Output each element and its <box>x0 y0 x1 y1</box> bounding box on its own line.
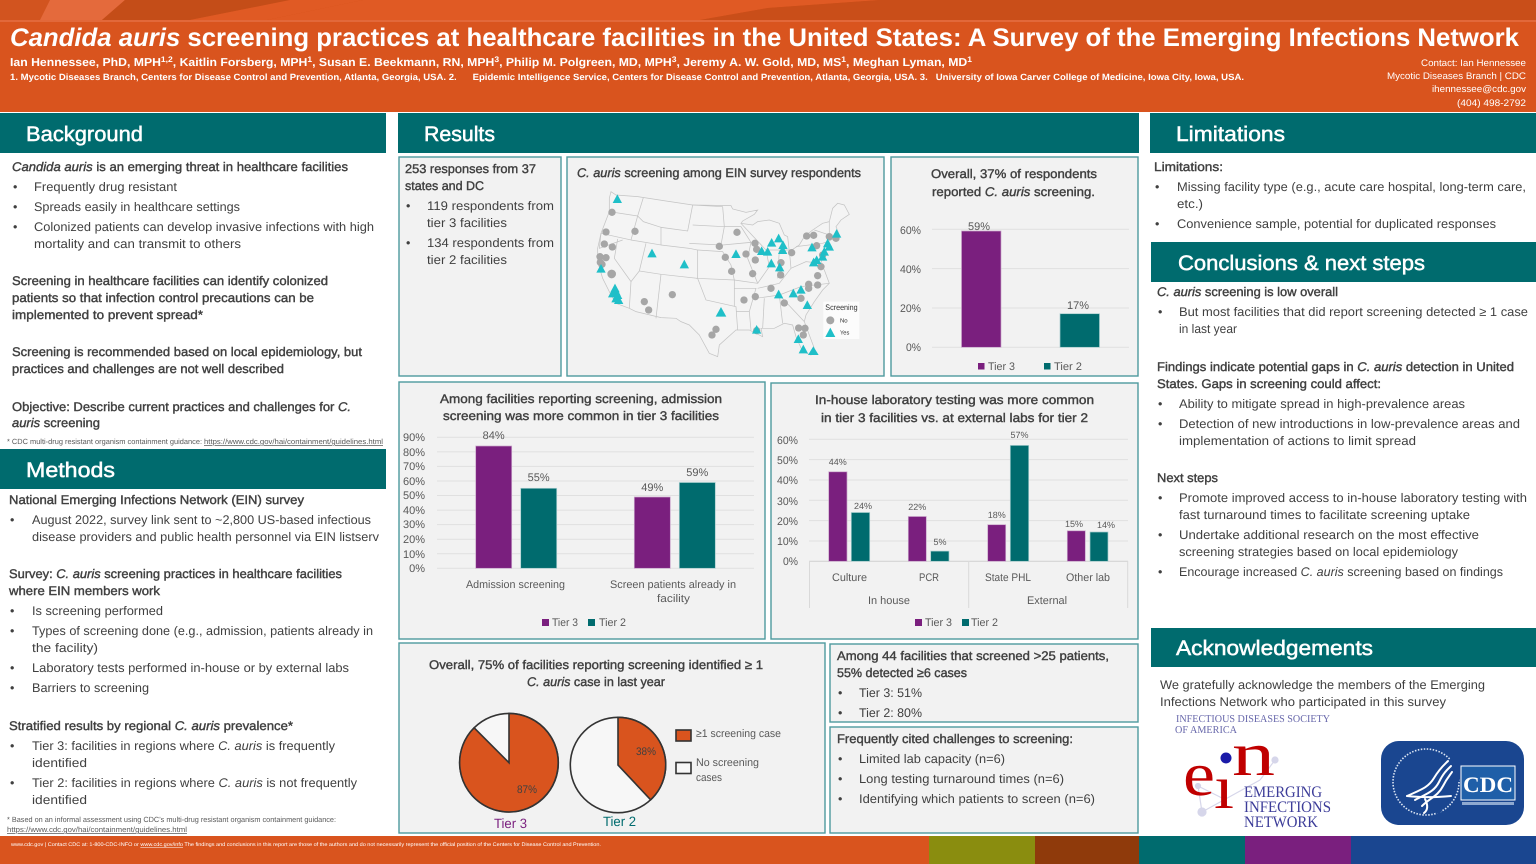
chart: tier 3 pie <box>460 713 558 812</box>
panel: laboratory testing bar chart: 22% <box>908 502 926 512</box>
panel: laboratory testing bar chart <box>771 383 1138 639</box>
panel: admission screening bar chart: 30% <box>403 519 425 531</box>
panel: methods <box>0 449 386 834</box>
panel: background: Frequently drug resistant <box>34 180 178 194</box>
panel: map <box>567 157 884 376</box>
panel: responses: 119 respondents from <box>427 199 554 213</box>
heading: results <box>398 113 1139 153</box>
panel: laboratory testing bar chart: PCR <box>919 572 939 584</box>
panel: admission screening bar chart: Tier 3 <box>552 617 578 629</box>
panel: background: • <box>13 200 17 214</box>
panel: conclusions and next steps: • <box>1158 491 1162 505</box>
contact: ihennessee@cdc.gov <box>1432 84 1526 95</box>
panel: acknowledgements <box>1151 628 1536 709</box>
chart: tier 3 pie: 87% <box>517 784 537 796</box>
panel: methods: • <box>10 776 14 790</box>
icon: EIN and IDSA logo <box>1175 714 1331 831</box>
panel: background: https://www.cdc.gov/hai/containment/guidelines.html <box>204 437 383 446</box>
panel: overall screening bar chart: Tier 2 <box>1054 361 1082 373</box>
authors: 3 <box>494 55 500 64</box>
panel: responses: 134 respondents from <box>427 236 554 250</box>
panel: laboratory testing bar chart: State PHL <box>985 572 1031 584</box>
footer <box>0 836 1536 864</box>
panel: laboratory testing bar chart: 20% <box>777 516 798 528</box>
panel: conclusions and next steps: implementation of actions to limit spread <box>1179 434 1416 448</box>
authors: 1 <box>967 55 973 64</box>
panel: laboratory testing bar chart: 57% <box>1010 430 1029 440</box>
panel: methods: identified <box>32 756 87 770</box>
icon: EIN and IDSA logo: INFECTIOUS DISEASES SOCIETY <box>1176 714 1330 725</box>
panel: pie charts: Tier 3 <box>494 816 527 831</box>
panel: challenges to screening: • <box>838 752 842 766</box>
panel: limitations <box>1150 113 1536 231</box>
chart: US map of respondents <box>596 192 859 357</box>
panel: conclusions and next steps: Undertake additional research on the most effective <box>1179 528 1479 542</box>
panel: methods: Tier 3: facilities in regions where C. auris is frequently <box>32 739 336 753</box>
panel: admission screening bar chart: 20% <box>403 534 425 546</box>
header banner <box>0 0 1536 112</box>
panel: methods: • <box>10 513 14 527</box>
panel: methods: Methods <box>26 459 115 482</box>
authors: Ian Hennessee, PhD, MPH <box>10 57 152 69</box>
panel: limitations: etc.) <box>1177 197 1203 211</box>
panel: challenges to screening: Limited lab capacity (n=6) <box>859 752 1005 766</box>
panel: acknowledgements: We gratefully acknowledge the members of the Emerging <box>1160 678 1485 692</box>
panel: admission screening bar chart: 55% <box>528 472 550 484</box>
panel: conclusions and next steps: • <box>1158 565 1162 579</box>
panel: responses: tier 3 facilities <box>427 216 507 230</box>
panel: overall screening bar chart: 40% <box>900 264 921 276</box>
panel: methods: * Based on an informal assessment using CDC’s multi-drug resistant organism containment guidance: <box>7 815 336 824</box>
panel: methods: • <box>10 604 14 618</box>
panel: laboratory testing bar chart: 24% <box>854 501 872 511</box>
panel: conclusions and next steps: fast turnaround times to facilitate screening uptake <box>1179 508 1470 522</box>
panel: overall screening bar chart: 59% <box>968 221 990 233</box>
panel: conclusions and next steps: C. auris screening is low overall <box>1157 285 1338 299</box>
panel: responses: • <box>406 199 410 213</box>
panel: background: Background <box>26 123 143 146</box>
panel: laboratory testing bar chart: in tier 3 facilities vs. at external labs for tier 2 <box>821 411 1088 425</box>
authors: , Meghan Lyman, MD <box>846 57 967 69</box>
panel: conclusions and next steps: Encourage increased C. auris screening based on findings <box>1179 565 1503 579</box>
panel: laboratory testing bar chart: 10% <box>777 536 798 548</box>
panel: background: auris screening <box>12 416 100 430</box>
panel: laboratory testing bar chart: 44% <box>829 457 847 467</box>
pie legend <box>676 728 781 784</box>
panel: overall screening bar chart: 17% <box>1067 300 1089 312</box>
affiliations: 1. Mycotic Diseases Branch, Centers for Disease Control and Prevention, Atlanta, Georgia, USA. 2. Epidemic Intelligence Service, Centers for Disease Control and Prevention, Atlanta, Georgia, USA. 3. University of Iowa Carver College of Medicine, Iowa City, Iowa, USA. <box>10 72 1244 82</box>
panel: conclusions and next steps: • <box>1158 528 1162 542</box>
panel: methods: disease providers and public health personnel via EIN listserv <box>32 530 380 544</box>
panel: admission screening bar chart: 0% <box>409 563 425 575</box>
panel: laboratory testing bar chart: Other lab <box>1066 572 1110 584</box>
panel: methods: • <box>10 681 14 695</box>
panel: laboratory testing bar chart: 40% <box>777 475 798 487</box>
panel: laboratory testing bar chart: 60% <box>777 435 798 447</box>
panel: methods: Survey: C. auris screening practices in healthcare facilities <box>9 567 342 581</box>
panel: overall screening bar chart: reported C. auris screening. <box>932 185 1095 199</box>
authors: 1 <box>307 55 313 64</box>
panel: conclusions and next steps: Findings indicate potential gaps in C. auris detection in United <box>1157 360 1514 374</box>
panel: methods: Stratified results by regional C. auris prevalence* <box>9 719 293 733</box>
panel: methods: the facility) <box>32 641 98 655</box>
icon: EIN and IDSA logo: n <box>1232 721 1275 789</box>
panel: admission screening bar chart: 49% <box>641 482 664 494</box>
icon: EIN and IDSA logo: e <box>1183 741 1215 809</box>
panel: map: C. auris screening among EIN survey respondents <box>577 166 861 180</box>
title: Candida auris screening practices at healthcare facilities in the United States: A Survey of the Emerging Infections Network <box>10 24 1520 52</box>
panel: overall screening bar chart: Tier 3 <box>988 361 1015 373</box>
panel: admission screening bar chart: 90% <box>403 432 425 444</box>
panel: methods: Laboratory tests performed in-house or by external labs <box>32 661 349 675</box>
panel: admission screening bar chart: 60% <box>403 476 425 488</box>
authors: , Philip M. Polgreen, MD, MPH <box>499 57 672 69</box>
panel: methods: • <box>10 661 14 675</box>
panel: methods: Is screening performed <box>32 604 163 618</box>
panel: laboratory testing bar chart: External <box>1027 595 1067 607</box>
panel: background: mortality and can transmit to others <box>34 237 241 251</box>
panel: laboratory testing bar chart: Tier 3 <box>925 617 952 629</box>
panel: overall screening bar chart: Overall, 37% of respondents <box>931 167 1097 181</box>
panel: methods: August 2022, survey link sent to ~2,800 US-based infectious <box>32 513 371 527</box>
panel: methods: https://www.cdc.gov/hai/containment/guidelines.html <box>7 825 187 834</box>
panel: admission screening bar chart: Tier 2 <box>599 617 626 629</box>
panel: methods: National Emerging Infections Network (EIN) survey <box>9 493 305 507</box>
panel: conclusions and next steps <box>1151 242 1536 579</box>
panel: acknowledgements: Acknowledgements <box>1176 637 1373 660</box>
contact <box>1387 58 1526 109</box>
panel: limitations: • <box>1155 180 1159 194</box>
panel: overall screening bar chart <box>891 157 1138 376</box>
panel: laboratory testing bar chart: 18% <box>988 510 1006 520</box>
pie legend: No screening <box>696 757 759 769</box>
chart: tier 2 pie <box>570 717 666 813</box>
panel: admission screening bar chart: Among facilities reporting screening, admission <box>440 392 722 406</box>
panel: limitations: Missing facility type (e.g., acute care hospital, long-term care, <box>1177 180 1526 194</box>
panel: responses: • <box>406 236 410 250</box>
panel: overall screening bar chart: 0% <box>906 342 921 354</box>
panel: challenges to screening <box>830 727 1138 833</box>
panel: pie charts: Tier 2 <box>603 814 636 829</box>
map legend: Yes <box>840 329 849 336</box>
panel: background: practices and challenges are not well described <box>12 362 284 376</box>
icon: EIN and IDSA logo: NETWORK <box>1244 814 1318 831</box>
heading: results: Results <box>424 123 495 146</box>
panel: pie charts: Overall, 75% of facilities reporting screening identified ≥ 1 <box>429 658 763 672</box>
panel: laboratory testing bar chart: Tier 2 <box>971 617 998 629</box>
panel: admission screening bar chart: 40% <box>403 505 425 517</box>
map legend: No <box>840 317 848 324</box>
panel: admission screening bar chart: Admission screening <box>466 579 565 591</box>
panel: limitations: Convenience sample, potential for duplicated responses <box>1177 217 1496 231</box>
panel: admission screening bar chart: 50% <box>403 490 425 502</box>
panel: methods: identified <box>32 793 87 807</box>
panel: overall screening bar chart: 20% <box>900 303 921 315</box>
panel: background: • <box>13 180 17 194</box>
panel: laboratory testing bar chart: 14% <box>1097 520 1115 530</box>
panel: admission screening bar chart: 10% <box>403 549 425 561</box>
panel: conclusions and next steps: screening strategies based on local epidemiology <box>1179 545 1459 559</box>
panel: challenges to screening: Identifying which patients to screen (n=6) <box>859 792 1095 806</box>
panel: admission screening bar chart: 80% <box>403 447 425 459</box>
pie legend: ≥1 screening case <box>696 728 781 740</box>
panel: conclusions and next steps: But most facilities that did report screening detected ≥ 1 case <box>1179 305 1528 319</box>
pie legend: cases <box>696 772 722 784</box>
panel: background: Screening is recommended based on local epidemiology, but <box>12 345 363 359</box>
panel: challenges to screening: Frequently cited challenges to screening: <box>837 732 1073 746</box>
panel: methods: • <box>10 624 14 638</box>
panel: challenges to screening: • <box>838 772 842 786</box>
panel: laboratory testing bar chart: Culture <box>832 572 867 584</box>
panel: facilities that screened >25 patients: • <box>838 686 842 700</box>
panel: conclusions and next steps: in last year <box>1179 322 1237 336</box>
authors: , Jeremy A. W. Gold, MD, MS <box>677 57 842 69</box>
panel: laboratory testing bar chart: In house <box>868 595 910 607</box>
panel: background: Objective: Describe current practices and challenges for C. <box>12 400 351 414</box>
panel: conclusions and next steps: Next steps <box>1157 471 1218 485</box>
panel: responses: tier 2 facilities <box>427 253 507 267</box>
map legend <box>823 302 859 339</box>
panel: background: * CDC multi-drug resistant organism containment guidance: <box>7 437 202 446</box>
panel: background: patients so that infection control precautions can be <box>12 291 314 305</box>
panel: facilities that screened >25 patients: • <box>838 706 842 720</box>
panel: laboratory testing bar chart: 50% <box>777 455 798 467</box>
icon: HHS and CDC logo <box>1381 741 1524 825</box>
panel: admission screening bar chart: Screen patients already in <box>610 579 736 591</box>
panel: conclusions and next steps: Ability to mitigate spread in high-prevalence areas <box>1179 397 1465 411</box>
chart: tier 2 pie: 38% <box>636 746 656 758</box>
panel: facilities that screened >25 patients: Tier 3: 51% <box>859 686 922 700</box>
contact: (404) 498-2792 <box>1457 98 1526 109</box>
panel: background: Screening in healthcare facilities can identify colonized <box>12 274 328 288</box>
panel: background: Candida auris is an emerging threat in healthcare facilities <box>12 160 348 174</box>
icon: HHS and CDC logo: CDC <box>1463 772 1513 797</box>
panel: laboratory testing bar chart: 30% <box>777 496 798 508</box>
panel: responses: 253 responses from 37 <box>405 162 536 176</box>
panel: background: • <box>13 220 17 234</box>
panel: facilities that screened >25 patients: Among 44 facilities that screened >25 patients, <box>837 649 1109 663</box>
panel: methods: where EIN members work <box>8 584 161 598</box>
panel: acknowledgements: Infections Network who participated in this survey <box>1160 695 1447 709</box>
icon: EIN and IDSA logo: OF AMERICA <box>1175 725 1237 736</box>
panel: background: Colonized patients can develop invasive infections with high <box>34 220 374 234</box>
panel: methods: Types of screening done (e.g., admission, patients already in <box>32 624 373 638</box>
panel: challenges to screening: Long testing turnaround times (n=6) <box>859 772 1064 786</box>
panel: pie charts: C. auris case in last year <box>527 675 665 689</box>
panel: laboratory testing bar chart: 15% <box>1065 519 1083 529</box>
icon: EIN and IDSA logo: INFECTIONS <box>1244 799 1331 816</box>
panel: facilities that screened >25 patients <box>830 644 1138 722</box>
panel: admission screening bar chart: facility <box>657 593 691 605</box>
panel: conclusions and next steps: Conclusions & next steps <box>1178 252 1425 275</box>
panel: limitations: Limitations: <box>1154 160 1223 174</box>
authors: 1 <box>841 55 847 64</box>
panel: background: Spreads easily in healthcare settings <box>34 200 240 214</box>
authors: 3 <box>672 55 677 64</box>
panel: conclusions and next steps: • <box>1158 305 1162 319</box>
panel: overall screening bar chart: 60% <box>900 225 921 237</box>
panel: methods: • <box>10 739 14 753</box>
map legend: Screening <box>825 303 858 312</box>
panel: laboratory testing bar chart: In-house laboratory testing was more common <box>815 393 1094 407</box>
panel: facilities that screened >25 patients: 55% detected ≥6 cases <box>837 666 967 680</box>
panel: admission screening bar chart: 70% <box>403 461 425 473</box>
authors: , Susan E. Beekmann, RN, MPH <box>312 57 494 69</box>
authors: , Kaitlin Forsberg, MPH <box>173 57 307 69</box>
panel: admission screening bar chart: 59% <box>686 467 709 479</box>
panel: pie charts <box>399 643 825 833</box>
panel: responses <box>399 157 561 376</box>
panel: facilities that screened >25 patients: Tier 2: 80% <box>859 706 922 720</box>
panel: conclusions and next steps: Promote improved access to in-house laboratory testing with <box>1179 491 1527 505</box>
panel: laboratory testing bar chart: 5% <box>933 537 947 547</box>
contact: Mycotic Diseases Branch | CDC <box>1387 71 1526 82</box>
panel: conclusions and next steps: • <box>1158 397 1162 411</box>
icon: EIN and IDSA logo: EMERGING <box>1244 784 1322 801</box>
panel: admission screening bar chart: 84% <box>483 430 505 442</box>
panel: admission screening bar chart <box>399 382 765 639</box>
panel: methods: Tier 2: facilities in regions where C. auris is not frequently <box>32 776 358 790</box>
panel: challenges to screening: • <box>838 792 842 806</box>
panel: admission screening bar chart: screening was more common in tier 3 facilities <box>443 409 719 423</box>
icon: EIN and IDSA logo: ı <box>1214 754 1234 822</box>
panel: limitations: • <box>1155 217 1159 231</box>
contact: Contact: Ian Hennessee <box>1421 58 1526 69</box>
authors: 1,2 <box>161 55 173 64</box>
panel: responses: states and DC <box>405 179 484 193</box>
panel: laboratory testing bar chart: 0% <box>783 556 798 568</box>
panel: conclusions and next steps: States. Gaps in screening could affect: <box>1157 377 1381 391</box>
panel: conclusions and next steps: • <box>1158 417 1162 431</box>
panel: conclusions and next steps: Detection of new introductions in low-prevalence areas and <box>1179 417 1520 431</box>
panel: background: implemented to prevent spread* <box>12 308 203 322</box>
footer: www.cdc.gov | Contact CDC at: 1-800-CDC-INFO or www.cdc.gov/info The findings and conclusions in this report are those of the authors and do not necessarily represent the official position of the Centers for Disease Control and Prevention. <box>11 842 601 848</box>
panel: limitations: Limitations <box>1176 123 1285 146</box>
panel: background <box>0 113 386 446</box>
panel: methods: Barriers to screening <box>32 681 149 695</box>
